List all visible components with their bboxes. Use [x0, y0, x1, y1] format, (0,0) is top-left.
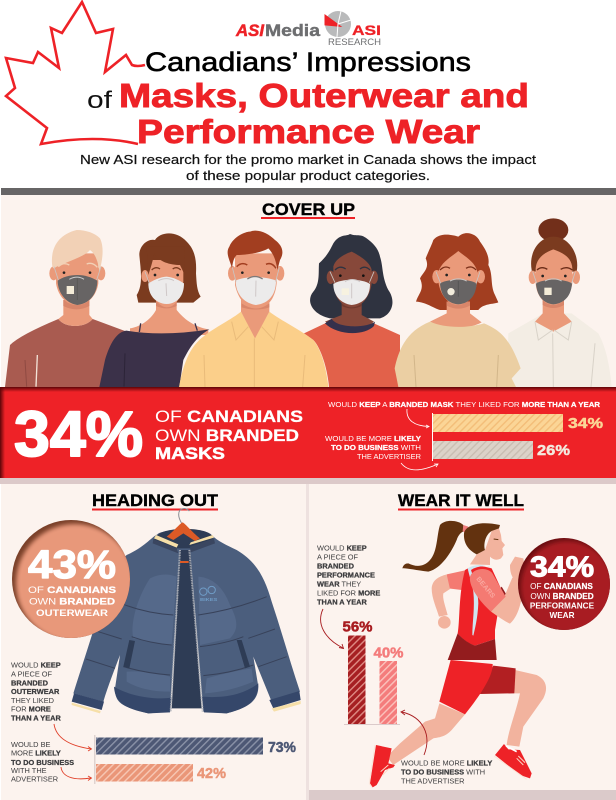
- logo: ASI Media: ASI: [235, 21, 265, 40]
- person 4: [304, 234, 400, 387]
- panel divider: [306, 484, 309, 800]
- label: do business: TO DO BUSINESS: [11, 758, 74, 767]
- panel: heading out: [1, 484, 306, 800]
- label: do business: WOULD BE MORE LIKELY: [401, 759, 492, 768]
- logo: ASI Media: Media: [265, 21, 321, 40]
- label: keep outerwear: THEY LIKED: [11, 696, 54, 705]
- title: [87, 47, 529, 150]
- person 5: [395, 233, 521, 387]
- label: keep performance wear: BRANDED: [317, 562, 355, 571]
- label: do business: ADVERTISER: [11, 774, 58, 784]
- label: keep outerwear: OUTERWEAR: [11, 687, 60, 696]
- label: keep performance wear: WEAR THEY: [317, 580, 361, 589]
- label: do business: TO DO BUSINESS WITH: [401, 768, 485, 777]
- illustration: runner: [369, 521, 546, 787]
- bar chart: performance wear: 40%: [374, 646, 404, 662]
- runner: torso, arms and head: BEARS: [474, 576, 496, 600]
- header: [6, 2, 536, 183]
- bar chart: masks: 34%: [568, 415, 603, 432]
- label: keep performance wear: LIKED FOR MORE: [317, 589, 380, 598]
- label: keep mask: WOULD KEEP A BRANDED MASK THEY LIKED FOR MORE THAN A YEAR: [328, 400, 601, 409]
- label: do business: TO DO BUSINESS WITH: [331, 443, 421, 452]
- panel: cover up: [1, 195, 616, 387]
- label: keep performance wear: WOULD KEEP: [317, 544, 367, 553]
- divider band: [0, 478, 616, 484]
- big stat 34%: 34%: [14, 398, 143, 470]
- stat label: [155, 407, 303, 463]
- icon: maple leaf outline: [6, 2, 145, 144]
- heading: cover up: COVER UP: [262, 201, 355, 219]
- stat circle: 43%: 43%: [28, 543, 116, 587]
- stat label: OF CANADIANS: [155, 407, 303, 426]
- stat circle: 34%: PERFORMANCE: [530, 602, 595, 610]
- bar chart: outerwear: 42%: [197, 766, 226, 782]
- label: keep outerwear: BRANDED: [11, 678, 49, 688]
- person 6: [507, 218, 612, 387]
- heading: WEAR IT WELL: [398, 491, 524, 510]
- person 3: [179, 231, 328, 387]
- runner: torso, arms and head: [402, 521, 525, 660]
- stat label: MASKS: [155, 444, 225, 463]
- label: do business: [11, 740, 74, 784]
- panel: masks statistic band: [0, 387, 616, 478]
- label: keep performance wear: A PIECE OF: [317, 553, 359, 562]
- label: keep outerwear: A PIECE OF: [11, 670, 53, 679]
- label: keep outerwear: [11, 661, 61, 722]
- label: do business: MORE LIKELY: [11, 749, 61, 758]
- stat label: OWN BRANDED: [155, 426, 299, 445]
- label: do business: THE ADVERTISER: [357, 452, 421, 461]
- title: of: [87, 87, 112, 114]
- label: keep performance wear: PERFORMANCE: [317, 571, 375, 580]
- stat circle: 34%: 34%: [530, 552, 594, 584]
- label: keep performance wear: [317, 544, 380, 606]
- subtitle: New ASI research for the promo market in Canada shows the impact: [80, 152, 536, 167]
- logo: ASI Media: [235, 21, 321, 40]
- logo: ASI Research: ASI: [352, 22, 381, 38]
- subtitle: [80, 152, 536, 183]
- title: Masks, Outerwear and: [119, 77, 529, 114]
- bar chart: performance wear: [342, 620, 404, 725]
- label: do business: WOULD BE MORE LIKELY: [325, 434, 421, 443]
- logo: ASI Research: [325, 11, 381, 48]
- stat circle: 34%: [518, 538, 613, 633]
- stat circle: 34%: OF CANADIANS: [530, 582, 593, 591]
- label: do business: [325, 434, 421, 461]
- person 2: [99, 233, 209, 387]
- bar chart: masks: [432, 413, 603, 461]
- logo: ASI Research: RESEARCH: [328, 37, 381, 48]
- divider bar: [1, 188, 616, 195]
- illustration: jacket: [72, 509, 301, 713]
- stat circle: 34%: WEAR: [549, 611, 575, 620]
- label: do business: WITH THE: [11, 766, 47, 775]
- bar chart: performance wear: 56%: [342, 620, 373, 636]
- label: do business: WOULD BE: [11, 740, 50, 749]
- illustration: six people in masks: [5, 218, 612, 387]
- stat circle: 34%: OWN BRANDED: [530, 592, 594, 601]
- illustration: jacket: BIKES: [200, 597, 217, 602]
- label: keep outerwear: FOR MORE: [11, 705, 51, 714]
- label: keep performance wear: THAN A YEAR: [317, 597, 367, 606]
- stat circle: 43%: OWN BRANDED: [29, 596, 115, 608]
- bar chart: outerwear: [94, 735, 296, 784]
- arrows: [321, 609, 427, 755]
- stat circle: 43%: OF CANADIANS: [28, 585, 116, 596]
- title: Performance Wear: [137, 113, 480, 150]
- label: do business: THE ADVERTISER: [401, 777, 465, 786]
- title: Canadians’ Impressions: [145, 47, 471, 77]
- label: keep outerwear: WOULD KEEP: [11, 661, 61, 670]
- heading: HEADING OUT: [92, 491, 219, 510]
- person 1: [5, 230, 127, 387]
- arrows: [54, 724, 92, 780]
- arrows: [401, 409, 438, 470]
- stat circle: 43%: [12, 520, 134, 642]
- bar chart: outerwear: 73%: [268, 740, 296, 756]
- subtitle: of these popular product categories.: [186, 168, 430, 183]
- stat circle: 43%: OUTERWEAR: [36, 608, 108, 619]
- label: do business: [401, 759, 492, 786]
- label: keep outerwear: THAN A YEAR: [11, 713, 61, 722]
- runner: legs and shoes: [369, 660, 546, 787]
- bar chart: masks: 26%: [537, 442, 570, 459]
- panel: wear it well: [309, 484, 616, 800]
